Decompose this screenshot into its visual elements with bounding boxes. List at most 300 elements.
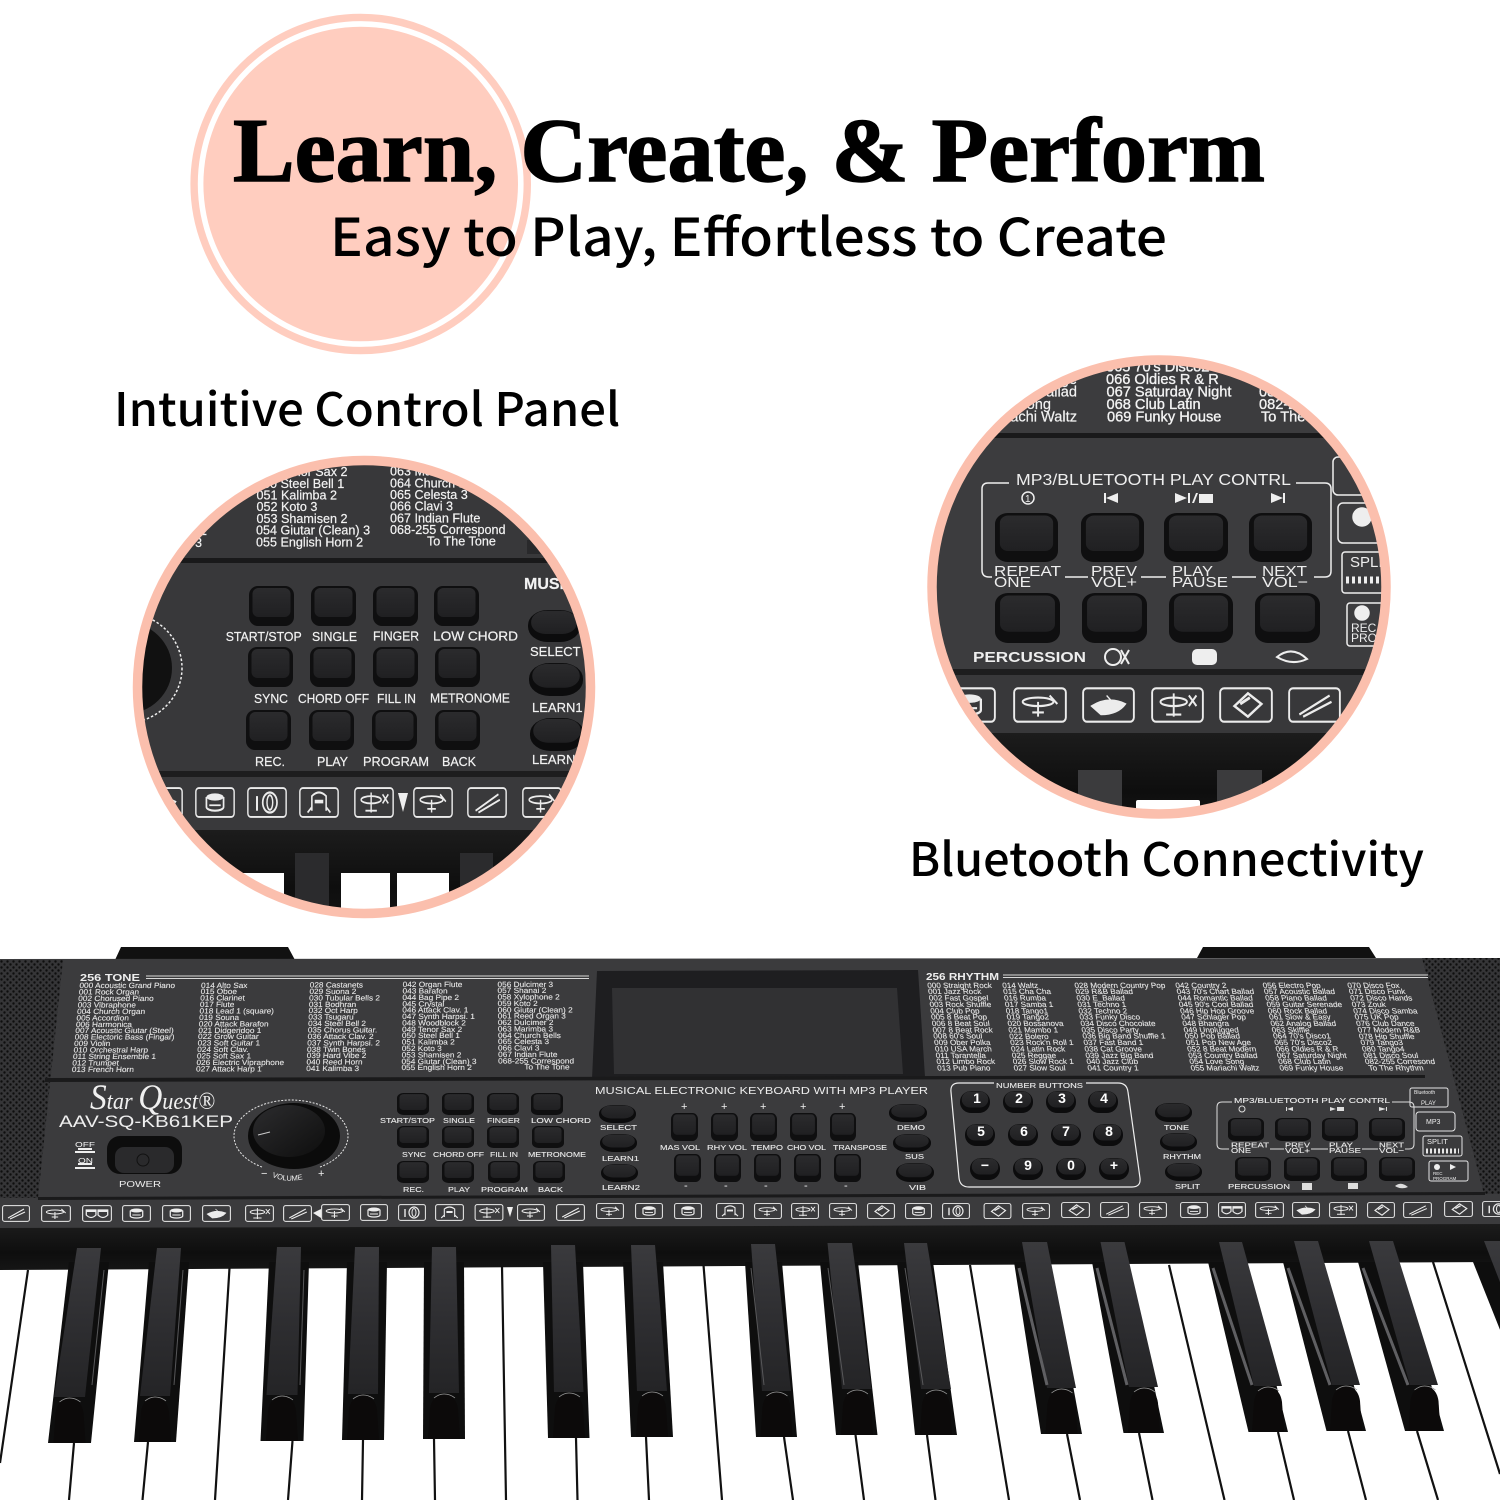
function buttons: [397, 1093, 565, 1183]
tone list: 068-255 Correspond: [498, 1057, 574, 1065]
function button labels: [380, 1116, 592, 1194]
rhythm list: 017 Samba 1: [1004, 1000, 1054, 1009]
subtitle: Easy to Play, Effortless to Create: [330, 196, 1167, 271]
mode boxes: MP3: [1426, 1119, 1440, 1126]
panel: control panel zoom circle: [132, 456, 596, 918]
tone list: 058 Xylophone 2: [498, 993, 560, 1001]
tone list: 010 Orchestral Harp: [73, 1046, 149, 1054]
tone list: 023 Soft Guitar 1: [197, 1039, 261, 1048]
button labels: START/STOP: [226, 629, 302, 644]
volume and tempo buttons: [660, 1101, 887, 1192]
tone list: 001 Rock Organ: [78, 988, 139, 997]
play control labels: NEXT: [1262, 563, 1307, 580]
button labels: FILL IN: [377, 691, 416, 706]
button labels: REC.: [255, 754, 285, 769]
tone rhythm split buttons: RHYTHM: [1163, 1152, 1201, 1161]
tone list: 064 Church Bells: [498, 1031, 561, 1040]
tone list: 027 Attack Harp 1: [196, 1065, 263, 1073]
rhythm list: 077 Modern R&B: [1357, 1026, 1421, 1034]
rhythm list: To The Rhythm: [1368, 1064, 1425, 1073]
tone list: 042 Organ Flute: [403, 981, 463, 989]
rhythm list: 057 Acoustic Ballad: [1263, 987, 1336, 996]
rhythm list: 051 Pop New Age: [1185, 1038, 1252, 1047]
function button labels: SYNC: [402, 1150, 427, 1159]
number buttons: 3: [1058, 1090, 1066, 1106]
tone list: 037 Synth Harpsi. 2: [307, 1039, 381, 1047]
tone list: 040 Reed Horn: [306, 1058, 363, 1067]
rhythm list: 033 Funky Disco: [1079, 1013, 1141, 1022]
tone list: 049 Tenor Sax 2: [402, 1025, 463, 1034]
rhythm list: [927, 981, 1437, 1073]
volume and tempo buttons: CHO VOL: [787, 1143, 826, 1152]
tone list: 004 Church Organ: [77, 1007, 146, 1016]
keys excerpt: [194, 830, 534, 909]
tone list: 017 Flute: [200, 1000, 235, 1009]
rhythm list: 076 Club Dance: [1355, 1019, 1416, 1028]
play control labels: VOL−: [1262, 574, 1308, 591]
rhythm list: 039 Jazz Big Band: [1085, 1051, 1154, 1060]
rhythm list: 024 Latin Rock: [1010, 1045, 1066, 1053]
product description: MUSICAL ELECTRONIC KEYBOARD WITH MP3 PLAYER: [595, 1085, 929, 1097]
tone list excerpt: 050 Steel Bell 1: [256, 477, 344, 491]
rhythm list: 050 Pop Ballad: [1184, 1032, 1241, 1041]
play control labels: PERCUSSION: [973, 649, 1086, 666]
speaker grilles: [0, 958, 1500, 1198]
rhythm list excerpt: 054 Love Song: [953, 397, 1051, 413]
rhythm list: 027 Slow Soul: [1013, 1064, 1066, 1073]
tone list: 063 Marimba 3: [498, 1025, 554, 1033]
side controls: [524, 578, 583, 764]
volume and tempo buttons: -: [844, 1180, 848, 1192]
tone list: 054 Giutar (Clean) 3: [402, 1057, 477, 1066]
mp3 control section: NEXT: [1379, 1140, 1404, 1150]
side controls: LEARN1: [532, 700, 583, 715]
rhythm list: 011 Tarantella: [935, 1051, 987, 1060]
button labels: METRONOME: [430, 690, 510, 706]
rhythm list: 003 Rock Shuffle: [929, 1000, 992, 1009]
rhythm list: 058 Piano Ballad: [1264, 994, 1328, 1002]
function button labels: CHORD OFF: [433, 1150, 484, 1159]
rhythm list: 034 Disco Chocolate: [1080, 1019, 1157, 1028]
button labels: BACK: [442, 754, 476, 769]
function button labels: PLAY: [448, 1185, 470, 1194]
rhythm list: 020 Bossanova: [1007, 1019, 1065, 1028]
mp3 bluetooth bracket: MP3/BLUETOOTH PLAY CONTRL: [1016, 472, 1291, 489]
heading: intuitive control panel: Intuitive Control Panel: [114, 374, 620, 440]
rhythm list: 048 Bhangra: [1182, 1019, 1230, 1028]
mp3 control section: REPEAT: [1231, 1140, 1269, 1150]
play control buttons: [995, 513, 1320, 643]
mp3 control section: PAUSE: [1329, 1146, 1361, 1155]
tone list excerpt: 054 Giutar (Clean) 3: [256, 524, 370, 538]
side controls: LEARN2: [532, 752, 583, 767]
rhythm list: 074 Disco Samba: [1352, 1007, 1419, 1015]
rhythm list: 046 Hip Hop Groove: [1179, 1007, 1256, 1015]
volume knob excerpt: [142, 619, 183, 720]
tone list: 018 Lead 1 (square): [199, 1007, 275, 1015]
rhythm list: 064 70's Disco1: [1272, 1032, 1332, 1041]
rhythm list: 082-255 Corresond: [1364, 1058, 1436, 1066]
tone list: 050 Steel Bell 1: [402, 1032, 461, 1040]
rhythm list: 079 Tango3: [1360, 1038, 1404, 1047]
white keys: [0, 1262, 1500, 1500]
tone list: 015 Oboe: [200, 988, 238, 996]
rhythm list: 065 70's Disco2: [1274, 1038, 1333, 1047]
rhythm list: 000 Straight Rock: [927, 981, 992, 990]
rhythm list: 010 USA March: [934, 1045, 992, 1053]
rhythm list excerpt: 055 Mariachi Waltz: [953, 410, 1077, 426]
rhythm list: 069 Funky House: [1279, 1064, 1345, 1073]
tone rhythm split buttons: SPLIT: [1175, 1182, 1200, 1191]
tone list: 007 Acoustic Giutar (Steel): [75, 1027, 174, 1035]
rhythm list: 043 70's Chart Ballad: [1176, 987, 1255, 996]
model number: AAV-SQ-KB61KEP: [59, 1112, 233, 1131]
rhythm list excerpt: 066 Oldies R & R: [1106, 372, 1219, 388]
tone list: 000 Acoustic Grand Piano: [79, 982, 176, 990]
rhythm list: 004 Club Pop: [930, 1007, 981, 1015]
button labels: SINGLE: [312, 629, 357, 644]
keyboard handles: [115, 947, 1376, 960]
rhythm list: 029 R&B Ballad: [1075, 987, 1134, 996]
keys excerpt: [992, 733, 1326, 810]
volume and tempo buttons: +: [681, 1101, 687, 1113]
rhythm list: 005 8 Beat Pop: [931, 1013, 988, 1022]
tone list: 014 Alto Sax: [201, 981, 248, 990]
mode boxes: [1410, 1088, 1468, 1181]
mp3 control section: [1217, 1096, 1415, 1191]
side controls: SELECT: [530, 644, 581, 659]
mode boxes: PRO: [1351, 631, 1377, 645]
rhythm list: 073 Zouk: [1351, 1000, 1387, 1009]
function button labels: BACK: [538, 1185, 563, 1194]
function button labels: SINGLE: [443, 1116, 475, 1125]
rhythm list: 037 Fast Band 1: [1083, 1038, 1144, 1047]
tone list: 021 Didgeridoo 1: [198, 1026, 262, 1035]
number buttons: +: [1110, 1157, 1118, 1173]
transport icons: 1: [1025, 494, 1031, 505]
volume knob: VOLUME: [274, 1172, 303, 1181]
rhythm list: 035 Disco Party: [1081, 1026, 1140, 1034]
tone list: 008 Electoric Bass (Fingar): [74, 1033, 175, 1042]
tone list: 031 Bodhran: [309, 1000, 356, 1009]
tone list excerpt: 040 Reed Horn 1: [111, 524, 207, 538]
rhythm list: 032 Techno 2: [1078, 1007, 1128, 1015]
tone list excerpt: 066 Clavi 3: [390, 500, 453, 514]
mp3 control section: PREV: [1285, 1140, 1311, 1150]
rhythm list: 015 Cha Cha: [1003, 987, 1052, 996]
256 tone heading: 256 TONE: [80, 973, 140, 984]
rhythm list: 056 Electro Pop: [1262, 981, 1322, 990]
rhythm list: 008 60's Soul: [933, 1032, 983, 1041]
rhythm list: 075 UK Pop: [1354, 1013, 1400, 1022]
tone list: 022 Grow Guitar: [198, 1033, 259, 1041]
number buttons: 4: [1100, 1090, 1108, 1106]
tone list: 039 Hard Vibe 2: [307, 1052, 367, 1060]
rhythm list excerpt: 069 Funky House: [1107, 410, 1221, 426]
mp3 control section: PERCUSSION: [1228, 1182, 1290, 1191]
tone list: 028 Castanets: [310, 981, 363, 989]
tone list: 029 Suona 2: [309, 987, 357, 996]
volume and tempo buttons: RHY VOL: [707, 1143, 747, 1152]
tone list: 036 Attack Clav. 2: [307, 1032, 374, 1041]
function button labels: METRONOME: [528, 1150, 586, 1159]
rhythm list: 044 Romantic Ballad: [1177, 994, 1254, 1002]
tone list: 043 Barafon: [402, 987, 448, 995]
button labels: PROGRAM: [363, 754, 429, 769]
tone list excerpt: To The Tone: [427, 534, 496, 548]
rhythm list: 061 Slow & Easy: [1268, 1013, 1332, 1022]
percussion icon strip: [166, 787, 561, 818]
function button labels: LOW CHORD: [531, 1116, 592, 1125]
rhythm list: 071 Disco Funk: [1348, 987, 1406, 996]
tone list: 041 Kalimba 3: [306, 1064, 360, 1073]
tone list: [71, 980, 574, 1074]
number buttons: 5: [977, 1123, 985, 1139]
volume knob: +: [318, 1168, 324, 1180]
rhythm list: 041 Country 1: [1087, 1064, 1140, 1073]
heading: bluetooth connectivity: Bluetooth Connectivity: [909, 824, 1424, 890]
mode boxes: [1332, 456, 1382, 647]
rhythm list: 038 Cat Groove: [1084, 1045, 1143, 1053]
rhythm list: 028 Modern Country Pop: [1074, 981, 1167, 990]
tone list: 046 Attack Clav. 1: [402, 1006, 469, 1015]
number buttons: [951, 1081, 1140, 1187]
select and learn buttons: LEARN1: [602, 1154, 639, 1163]
rhythm list: 059 Guitar Serenade: [1266, 1000, 1343, 1009]
rhythm list: 068 Club Latin: [1277, 1058, 1332, 1066]
rhythm list: 066 Oldies R & R: [1275, 1045, 1340, 1053]
rhythm list: 001 Jazz Rock: [928, 987, 982, 996]
rhythm list: 063 Skiffle: [1271, 1026, 1311, 1034]
button labels: CHORD OFF: [298, 691, 369, 706]
number buttons: 8: [1105, 1123, 1113, 1139]
rhythm list: 023 Rock'n Roll 1: [1010, 1038, 1074, 1047]
tone list: 045 Crystal: [402, 1000, 445, 1008]
tone list: 016 Clarinet: [200, 994, 246, 1003]
volume and tempo buttons: TEMPO: [751, 1143, 783, 1152]
tone list excerpt: 055 English Horn 2: [256, 536, 363, 550]
tone list excerpt: 049 Tenor Sax 2: [256, 465, 348, 479]
tone list excerpt: 052 Koto 3: [256, 500, 317, 514]
volume and tempo buttons: -: [804, 1180, 808, 1192]
power switch: POWER: [119, 1179, 161, 1189]
tone list: 047 Synth Harpsi. 1: [402, 1012, 476, 1021]
tone list: 062 Dulcimer 2: [498, 1018, 554, 1027]
rhythm list: 045 90's Cool Ballad: [1178, 1000, 1254, 1009]
demo sus vib buttons: DEMO: [897, 1123, 925, 1132]
tone list: 051 Kalimba 2: [402, 1038, 455, 1047]
rhythm list excerpt: 067 Saturday Night: [1106, 384, 1231, 400]
tone list: 055 English Horn 2: [401, 1063, 472, 1072]
number buttons: NUMBER BUTTONS: [996, 1081, 1083, 1090]
tone list: 057 Shanai 2: [497, 986, 547, 995]
number buttons: 6: [1020, 1123, 1028, 1139]
display screen: [592, 970, 925, 1079]
percussion small icons: [1105, 649, 1307, 665]
volume and tempo buttons: +: [800, 1101, 806, 1113]
function button labels: START/STOP: [380, 1116, 435, 1125]
rhythm list: 006 8 Beat Soul: [931, 1019, 990, 1028]
rhythm list: 080 Tango4: [1361, 1045, 1406, 1053]
tone list excerpt: 068-255 Correspond: [390, 523, 506, 537]
volume and tempo buttons: -: [764, 1180, 768, 1192]
tone list: 020 Attack Barafon: [198, 1020, 269, 1028]
tone list: 067 Indian Flute: [498, 1050, 558, 1059]
rhythm list: 042 Country 2: [1175, 981, 1227, 990]
panel: keyboard photo: [0, 947, 1500, 1500]
tone list: 026 Electric Vipraphone: [196, 1058, 285, 1067]
rhythm list: 081 Disco Soul: [1363, 1051, 1419, 1060]
rhythm list: 078 Hip Shuffle: [1358, 1032, 1416, 1041]
rhythm list: 031 Techno 1: [1077, 1000, 1127, 1009]
mode boxes: SPLIT: [1427, 1137, 1448, 1146]
select and learn buttons: [599, 1105, 640, 1192]
mode boxes: PLAY: [1421, 1101, 1436, 1107]
rhythm list: 026 Slow Rock 1: [1012, 1058, 1074, 1066]
mode boxes: Bluetooth: [1414, 1090, 1435, 1096]
play control labels: PAUSE: [1172, 574, 1228, 591]
button labels: FINGER: [373, 628, 419, 644]
rhythm list: 055 Mariachi Waltz: [1190, 1064, 1260, 1073]
tone list: 048 Woodblock 2: [402, 1019, 467, 1027]
tone rhythm split buttons: [1155, 1103, 1202, 1191]
volume and tempo buttons: +: [760, 1101, 766, 1113]
tone list: 025 Soft Sax 1: [197, 1052, 252, 1060]
rhythm list: 009 Ober Polka: [934, 1038, 992, 1047]
tone list excerpt: 051 Kalimba 2: [256, 488, 337, 502]
rhythm list: 016 Rumba: [1003, 994, 1047, 1002]
volume and tempo buttons: -: [684, 1180, 688, 1192]
rhythm list: 062 Analog Ballad: [1270, 1019, 1337, 1028]
tone list: 032 Oct Harp: [308, 1007, 359, 1015]
number buttons: 7: [1062, 1123, 1070, 1139]
rhythm list: 049 Unplugged: [1183, 1026, 1240, 1034]
play control labels: PREV: [1091, 563, 1137, 580]
tone list: 034 Steel Bell 2: [308, 1019, 367, 1028]
rhythm list: 047 Schlager Pop: [1181, 1013, 1247, 1022]
mode boxes: PROGRAM: [1433, 1176, 1457, 1181]
rhythm list: 052 8 Beat Modern: [1186, 1045, 1257, 1053]
rhythm list: 012 Limbo Rock: [936, 1058, 996, 1066]
button labels: SYNC: [254, 691, 288, 706]
tone list: 038 Twin Bones: [307, 1045, 366, 1054]
rhythm list: 025 Reggae: [1011, 1051, 1057, 1060]
volume and tempo buttons: -: [724, 1180, 728, 1192]
rhythm list: 036 Big Band Shuffle 1: [1082, 1032, 1167, 1041]
tone list: To The Tone: [524, 1063, 570, 1072]
mp3 control section: VOL+: [1285, 1146, 1311, 1155]
play control labels: PLAY: [1172, 563, 1213, 580]
function button labels: REC.: [403, 1185, 424, 1194]
tone list excerpt: 064 Church Bells: [390, 476, 486, 490]
rhythm list excerpt: 081 Disco Soul: [1259, 384, 1357, 400]
select and learn buttons: SELECT: [600, 1123, 637, 1132]
volume knob: [234, 1100, 348, 1181]
rhythm list: 021 Mambo 1: [1008, 1026, 1059, 1034]
tone list: 059 Koto 2: [498, 999, 538, 1008]
rhythm list: 013 Pub Piano: [937, 1064, 992, 1073]
tone list excerpt: 063 Marimba 3: [390, 464, 474, 478]
tone list: 066 Clavi 3: [498, 1044, 540, 1053]
volume knob: −: [261, 1168, 267, 1180]
demo sus vib buttons: SUS: [905, 1152, 924, 1161]
power switch: OFF: [75, 1140, 96, 1149]
volume and tempo buttons: +: [839, 1101, 845, 1113]
rhythm list: 053 Country Ballad: [1188, 1051, 1258, 1060]
volume and tempo buttons: TRANSPOSE: [833, 1143, 887, 1152]
tone list excerpt: [195, 466, 505, 550]
button labels: LOW CHORD: [433, 628, 518, 644]
rhythm list excerpt: 051 Pop New Age: [960, 372, 1077, 388]
percussion icon strip: [3, 1202, 1500, 1221]
tone list: 044 Bag Pipe 2: [402, 993, 460, 1002]
demo sus vib buttons: VIB: [909, 1183, 926, 1192]
transport icons: [1022, 492, 1285, 505]
rhythm list: 014 Waltz: [1002, 981, 1039, 990]
dark keybed: [0, 1224, 1500, 1272]
power switch: [75, 1136, 182, 1189]
rhythm list: 070 Disco Fox: [1346, 981, 1400, 990]
volume and tempo buttons: +: [721, 1101, 727, 1113]
tone list: 019 Souna: [199, 1013, 240, 1022]
tone rhythm split buttons: TONE: [1164, 1123, 1189, 1132]
rhythm list: 018 Tango1: [1005, 1007, 1049, 1015]
rhythm list excerpt: 065 70's Disco2: [1106, 360, 1209, 376]
number buttons: 2: [1015, 1090, 1023, 1106]
rhythm list excerpt: 053 Country Ballad: [953, 384, 1077, 400]
number buttons: 9: [1024, 1157, 1032, 1173]
tone list: 052 Koto 3: [402, 1044, 442, 1053]
rhythm list excerpt: To The Rhythm: [1261, 410, 1360, 426]
rhythm list: 054 Love Song: [1189, 1058, 1245, 1066]
tone list: 012 Trumpet: [72, 1059, 120, 1067]
tone list: 006 Harmonica: [76, 1020, 133, 1029]
tone list: 033 Tsugaru: [308, 1013, 354, 1022]
tone list: 003 Vibraphone: [77, 1001, 137, 1009]
power switch: ON: [78, 1156, 93, 1165]
keyboard body: [0, 958, 1500, 1229]
volume and tempo buttons: MAS VOL: [660, 1143, 700, 1152]
button grid: [246, 586, 480, 750]
mp3 control section: PLAY: [1329, 1140, 1353, 1150]
rhythm list: 030 E_Ballad: [1076, 994, 1126, 1002]
rhythm list: 067 Saturday Night: [1276, 1051, 1348, 1060]
panel: bluetooth zoom circle: [925, 350, 1407, 830]
mode boxes: REC: [1351, 621, 1377, 635]
number buttons: −: [981, 1157, 989, 1173]
play control labels: [973, 563, 1308, 666]
number buttons: 1: [973, 1090, 981, 1106]
mp3 bluetooth bracket: [982, 472, 1331, 577]
rhythm list: 060 Rock Ballad: [1267, 1007, 1328, 1015]
mode boxes: REC: [1433, 1171, 1443, 1176]
rhythm list: 007 8 Beat Rock: [932, 1026, 993, 1034]
button labels: [226, 628, 518, 769]
rhythm list excerpt: 082-255 Corresond: [1259, 397, 1385, 413]
tone list excerpt: 065 Celesta 3: [390, 488, 468, 502]
rhythm list: 002 Fast Gospel: [928, 994, 989, 1002]
button labels: PLAY: [317, 754, 348, 769]
tone list: 024 Soft Clav.: [197, 1045, 249, 1054]
mode boxes: SPLIT: [1350, 554, 1392, 571]
black keys: [48, 1241, 1500, 1443]
tone list excerpt: 067 Indian Flute: [390, 512, 480, 526]
tone list: 005 Accordion: [76, 1014, 129, 1022]
tone list: 011 String Ensemble 1: [73, 1052, 157, 1061]
rhythm list excerpt: [1011, 364, 1305, 425]
tone list: 030 Tubular Bells 2: [309, 994, 381, 1002]
tone list: 065 Celesta 3: [498, 1038, 550, 1046]
